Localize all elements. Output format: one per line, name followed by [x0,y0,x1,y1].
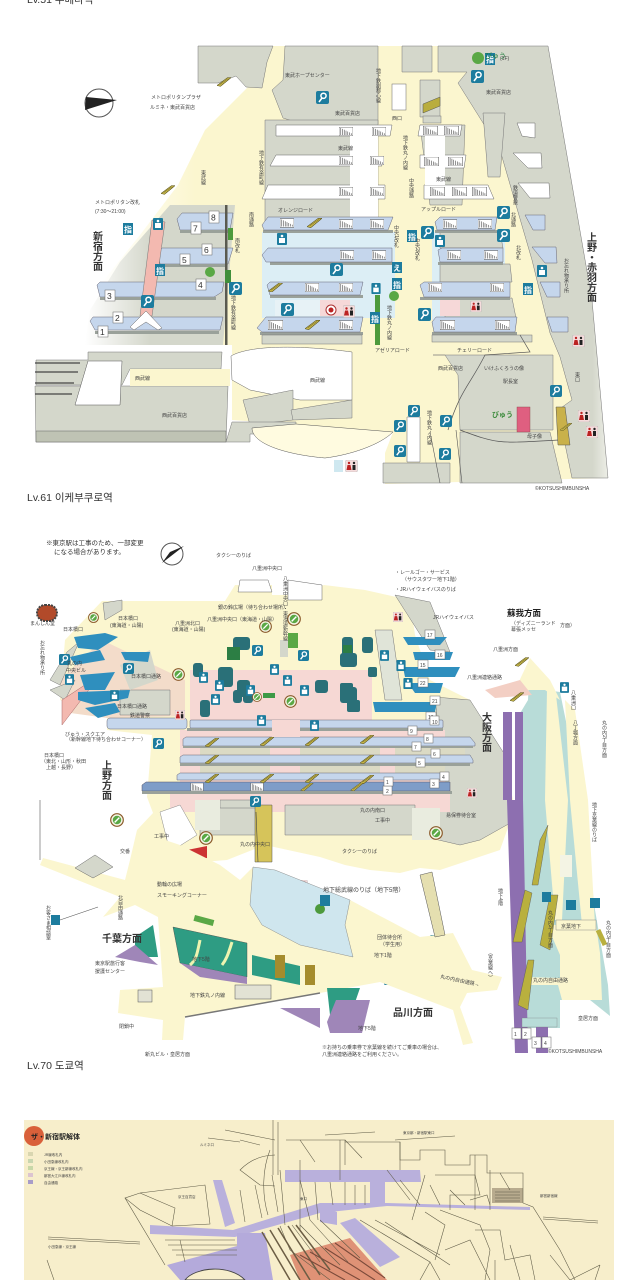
labels: 東武百貨店 [486,89,511,96]
left dark blue platforms: 15 [420,663,426,669]
note: ※東京駅は工事のため、一部変更 [46,538,144,547]
labels: 閉鎖中 [119,1023,134,1030]
labels: 八重洲中央口 [252,565,282,572]
labels: 中央1改札 [393,224,399,249]
labels: 蘇我方面 [507,608,542,618]
labels: スモーキングコーナー [157,892,207,899]
labels: ©KOTSUSHIMBUNSHA [535,485,590,492]
coloured zones [150,1170,530,1280]
platform numbers: 3 [107,291,112,301]
labels: （東北・山形・秋田 [41,758,86,765]
labels: 南通路 [248,211,254,228]
title badge: ザ・新宿駅解体 [31,1132,80,1141]
platform numbers: 5 [182,255,187,265]
labels: 八重洲連絡通路 [467,674,502,681]
labels: 日本橋口 [118,615,138,622]
platform numbers: 6 [204,245,209,255]
line drawing [47,1120,600,1280]
labels: 大阪方面 [480,711,492,753]
labels: 東武ホープセンター [285,72,330,79]
labels: 団体待合所 [377,934,402,941]
labels: 日本橋口通路 [131,673,161,680]
labels: （サウスタワー地下1階） [402,576,460,583]
tiny annotations [48,1130,558,1249]
labels: 日本橋口通路 [117,703,147,710]
icons: lockers and signs: 指 [124,224,132,234]
platform numbers: 2 [115,313,120,323]
labels: 中央2改札 [414,237,420,262]
central platforms: 6 [433,752,436,758]
labels: 鉄道警察 [130,712,150,719]
labels: ・レールゴー・サービス [395,569,450,576]
labels: お忘れ物承り所 [39,640,45,676]
labels: （学生用） [380,941,405,948]
platform numbers: 7 [193,224,198,234]
labels: 西武線 [310,377,325,384]
central platforms: 5 [418,761,421,767]
heading: Lv.70: Lv.70 도쿄역 [27,1060,84,1072]
central platforms: 8 [426,737,429,743]
icons: lockers and signs: 指 [408,232,416,242]
grey buildings top [198,46,608,478]
central platforms: 9 [410,729,413,735]
labels: 東京駅旅行客 [95,960,125,967]
tiny annotations: 東京都・新宿駅東口 [403,1130,435,1135]
labels: びゅう [485,52,506,60]
labels: 丸の内 [67,660,82,667]
labels: 丸の内中央口 [240,841,270,848]
labels: ©KOTSUSHIMBUNSHA [548,1048,603,1055]
platform numbers: 8 [211,212,216,222]
labels: 工事中 [375,817,390,824]
labels: 西武百貨店 [162,412,187,419]
labels: 八重洲中央口（東海道・山陽） [207,616,277,623]
labels: オレンジロード [278,208,313,214]
icons: lockers and signs: 指 [156,266,164,276]
labels: 八重洲連絡通路をご利用ください。 [322,1051,402,1058]
hatched roofs [262,1225,385,1280]
heading: Lv.61: Lv.61 이케부쿠로역 [27,492,113,504]
labels: 千葉方面 [102,932,142,945]
left dark blue platforms: 22 [420,681,426,687]
labels: 鉄道警察 [512,184,518,206]
icons: lockers and signs: 指 [486,54,494,64]
central platforms: 2 [386,789,389,795]
labels: 銀の鈴広場（待ち合わせ場所） [218,604,288,611]
icons: lockers and signs [123,52,598,472]
stairs and escalators [161,78,572,431]
labels: 東武百貨店 [335,110,360,117]
labels: 新丸ビル・皇居方面 [145,1051,190,1058]
labels: ルミネ・東武百貨店 [150,104,195,111]
labels: 駅長室 [503,378,518,385]
labels: 東口 [574,371,580,383]
labels: 工事中 [154,833,169,840]
labels: 地下5階 [192,956,210,963]
labels: 援護センター [95,968,125,975]
labels: タクシーのりば [216,552,251,559]
labels: びゅう [492,410,513,419]
labels: (東海道・山陽) [172,626,206,633]
labels: アップルロード [421,207,456,213]
platform numbers: 1 [100,327,105,337]
tiny annotations: 東口 [300,1196,308,1201]
labels: 地下鉄丸ノ内線 [402,134,408,171]
Keiyo line panel: 2 [524,1032,527,1038]
right lower department block [383,335,570,483]
labels: 丸の内3丁目方面 [605,919,611,959]
labels: 地下1階 [374,952,392,959]
labels: 地下4階 [497,887,503,907]
labels: 丸の内南口 [360,807,385,814]
note [46,538,144,556]
labels: お客さま相談室 [45,905,51,940]
platforms centre [257,217,532,345]
labels [30,552,611,1058]
labels: 幕張メッセ [511,626,536,633]
labels: チェリーロード [457,348,492,354]
labels: 南改札 [234,237,240,254]
labels: 八丁堀方面 [572,720,578,746]
central platforms [107,716,475,862]
central platforms: 3 [432,782,435,788]
labels: 上野方面 [100,759,112,801]
title badge [24,1126,80,1146]
labels: 西武百貨店 [438,365,463,372]
Tobu lines centre [262,80,568,332]
labels: 東武線 [200,169,206,186]
labels: ※お持ちの乗車券で京葉線を続けてご乗車の場合は、 [322,1044,442,1051]
labels: 西口 [392,116,402,122]
legend: JR線改札内 [44,1152,63,1157]
labels: 北通路 [510,211,516,228]
labels: 上越・長野） [46,764,76,771]
labels: 品川方面 [393,1006,433,1019]
legend: 小田急線改札内 [44,1159,69,1164]
Keiyo line panel: 1 [514,1032,517,1038]
legend: 京王線・京王新線改札内 [44,1166,83,1171]
Keiyo line panel: 3 [534,1041,537,1047]
icons: tokyo station signs [37,605,578,1013]
labels: 八重洲方面 [493,646,518,653]
left platforms [85,205,235,345]
labels: JRハイウェイバス [433,614,474,621]
labels: 地下京葉線のりば [591,801,597,843]
tiny annotations: 都営新宿線 [540,1193,558,1198]
labels: 西武線 [135,375,150,382]
panel: Ikebukuro station map [35,46,608,492]
labels: 丸の内自由通路→ [440,973,480,988]
central clusters [193,630,402,730]
labels: 日本橋口 [63,626,83,633]
labels: 新宿方面 [90,230,102,272]
labels: 地下鉄有楽町線 [230,294,236,331]
icons: lockers and signs: え [393,263,401,273]
panel: Tokyo station map [30,538,611,1058]
icons: lockers and signs: 指 [371,314,379,324]
labels: まんしん堂 [30,620,55,627]
labels: （ディズニーランド [511,620,556,627]
labels: 地下鉄副都心線 [375,67,381,104]
labels: 八重洲口 [570,690,576,711]
base concourse [85,46,606,484]
labels: （京葉線へ） [487,950,493,980]
left dark blue platforms: 21 [432,699,438,705]
panel: Shinjuku station cross-section [24,1120,614,1280]
labels: 八重洲中央口・東海道新幹線 [282,576,288,642]
labels: 丸の内自由通路 [533,977,568,984]
tiny annotations: 小田急線・京王線 [48,1244,76,1249]
labels: (7:30～21:00) [95,209,126,215]
central platforms: 1 [386,780,389,786]
Keiyo line panel: 4 [544,1041,547,1047]
left dark blue platforms: 17 [427,633,433,639]
note: になる場合があります。 [54,547,125,556]
labels: (1F) [500,56,510,62]
lower concourse and platforms [40,800,502,1045]
labels: 日本橋口 [44,752,64,759]
labels: 東武線 [436,176,451,183]
labels: (東海道・山陽) [110,622,144,629]
labels: 地下鉄丸ノ内線 [426,409,432,446]
base concourse upper [50,580,513,873]
left dark blue platforms: 16 [437,653,443,659]
labels: 北自由通路 [117,894,123,921]
labels: 丸の内2丁目方面 [547,909,553,949]
labels: 八重洲北口 [175,620,200,627]
tiny annotations: ルミネ口 [200,1142,214,1147]
central platforms: 7 [414,745,417,751]
icons: lockers and signs: 指 [524,285,532,295]
labels: 地下鉄有楽町線 [258,149,264,186]
labels: アゼリアロード [375,347,410,354]
labels: びゅう・スクエア [65,731,105,738]
platform numbers: 4 [198,280,203,290]
labels: 中央通路 [408,177,414,199]
icon: compass [85,89,117,117]
legend: 自由通路 [44,1180,58,1185]
labels: 地下5階 [358,1025,376,1032]
labels: 京葉地下 [561,923,581,930]
icon: compass [161,543,184,565]
labels: 易保券待合室 [446,812,476,819]
tiny annotations: 京王百貨店 [178,1194,196,1199]
labels [90,52,596,492]
labels: メトロポリタンプラザ [151,94,201,101]
central platforms: 4 [442,775,445,781]
labels: メトロポリタン改札 [95,199,140,206]
labels: 丸の内2丁目方面 [601,719,607,759]
labels: 皇居方面 [578,1015,598,1022]
legend: 都営大江戸線改札内 [44,1173,76,1178]
labels: 交番 [120,848,130,855]
labels: ・JRハイウェイバスのりば [395,586,456,593]
left dark blue platforms [70,630,460,721]
labels: タクシーのりば [342,848,377,855]
labels: 中央ビル [66,667,86,674]
Keiyo line panel [485,658,610,1053]
icons: lockers and signs: 指 [393,280,401,290]
labels: （新幹線地下待ち合わせコーナー） [66,736,146,743]
labels: 地下鉄丸ノ内線 [386,304,392,341]
labels: 地下鉄丸ノ内線 [190,992,225,999]
platform numbers [98,211,219,337]
labels: 東武線 [338,145,353,152]
legend [28,1152,83,1185]
labels: 母子像 [527,433,542,440]
labels: 上野・赤羽方面 [584,231,596,303]
labels: 地下総武線のりば（地下5階） [323,886,404,894]
central platforms: 10 [432,720,438,726]
labels: いけふくろうの像 [484,365,524,372]
labels: 方面） [560,622,575,629]
labels: 北改札 [515,244,521,261]
left dark blue platforms: 10 [428,715,434,721]
Seibu area bottom left [35,347,393,458]
labels: 動輪の広場 [157,881,182,888]
labels: お忘れ物承り所 [563,258,569,294]
